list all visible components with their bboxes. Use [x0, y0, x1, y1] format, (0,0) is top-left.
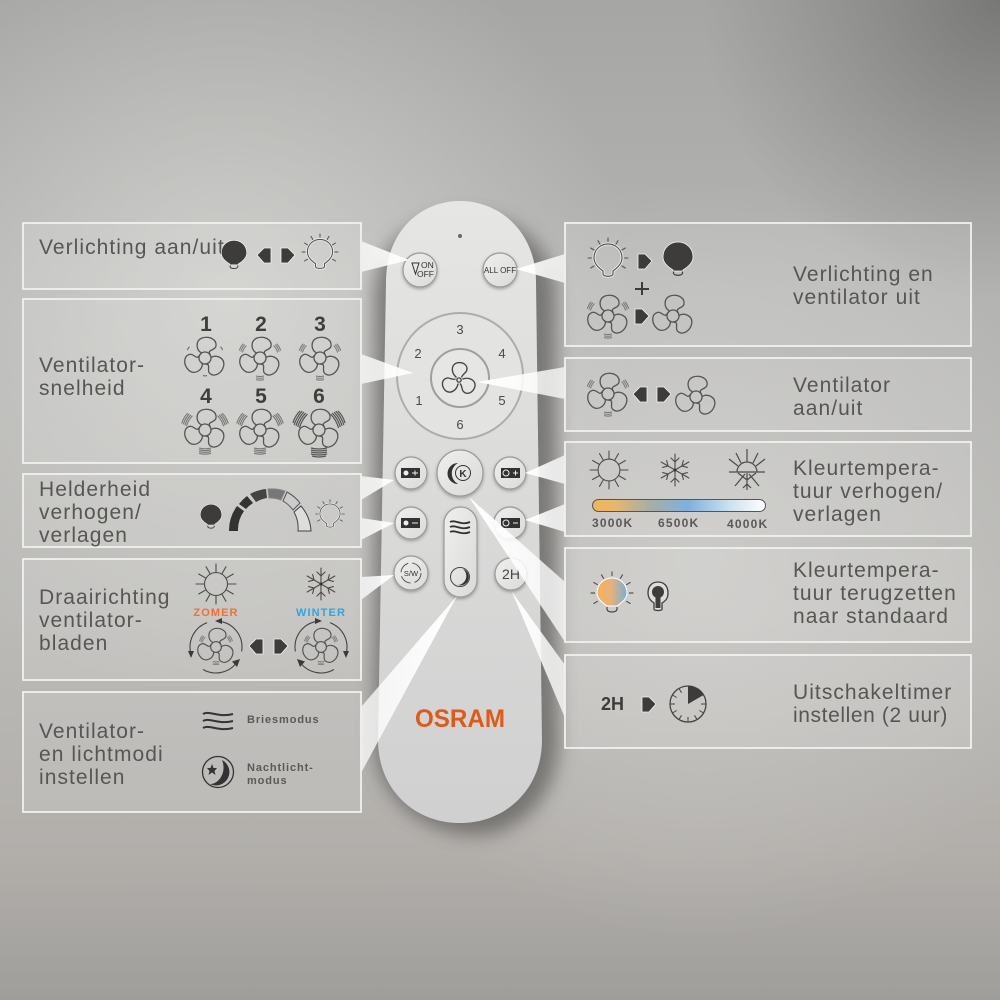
icon: dark bulb	[200, 504, 222, 528]
fan icons	[181, 337, 346, 457]
panel: timer	[565, 655, 971, 748]
scale labels: 4000K	[727, 517, 768, 531]
heading: tuur verhogen/	[793, 480, 943, 503]
speed ring: 2	[414, 346, 422, 361]
remote control body	[378, 201, 542, 823]
label: night light: modus	[247, 775, 288, 787]
button: rotation direction	[394, 556, 428, 590]
heading: ventilator uit	[793, 286, 921, 309]
panel: colour temperature	[565, 442, 971, 536]
heading: Verlichting aan/uit	[39, 236, 225, 259]
label: 2H: 2H	[601, 694, 624, 714]
panel: fan on/off	[565, 358, 971, 431]
icon: arrow	[638, 254, 652, 269]
icon: fan off	[650, 295, 695, 336]
panel: colour reset	[565, 548, 971, 642]
speed numbers: 4	[200, 385, 212, 408]
button: colour up	[494, 457, 526, 489]
plus	[635, 282, 649, 295]
icon: light bulb	[302, 234, 338, 268]
icon: arrow left	[257, 248, 271, 263]
label: summer: ZOMER	[193, 607, 239, 619]
heading: Ventilator-	[39, 354, 145, 377]
scale labels	[592, 516, 768, 531]
heading: instellen (2 uur)	[793, 704, 948, 727]
speed ring	[397, 313, 523, 439]
speed numbers: 5	[255, 385, 267, 408]
icon: fan running	[585, 373, 630, 416]
panel: light and fan off	[565, 223, 971, 346]
button: colour down	[494, 507, 526, 539]
button: brightness up	[395, 457, 427, 489]
heading: Ventilator-	[39, 720, 145, 743]
icon: colour bulb	[591, 572, 633, 612]
speed ring: 3	[456, 322, 464, 337]
heading: bladen	[39, 632, 108, 655]
heading: snelheid	[39, 377, 126, 400]
icon: fan running	[585, 295, 630, 338]
button: colour reset K	[437, 450, 483, 496]
icon: snowflake	[305, 568, 337, 600]
icon: light bulb	[588, 238, 628, 276]
speed numbers	[200, 313, 326, 408]
button: 2H	[495, 558, 527, 590]
icon: breeze	[203, 713, 233, 729]
icon: fan off	[673, 376, 718, 417]
button: on/off: ON	[421, 260, 434, 270]
label: breeze: Briesmodus	[247, 714, 320, 726]
speed ring: 4	[498, 346, 506, 361]
button: brightness down	[395, 507, 427, 539]
panel: modes	[23, 692, 361, 812]
fan summer	[188, 618, 242, 673]
panel: fan speed	[23, 299, 361, 463]
label: winter: WINTER	[296, 607, 346, 619]
button: all off	[483, 253, 517, 287]
heading: verlagen	[39, 524, 128, 547]
speed ring: 6	[456, 417, 464, 432]
heading: Helderheid	[39, 478, 151, 501]
remote shadow	[374, 215, 559, 835]
indicator led	[458, 234, 462, 238]
heading: verhogen/	[39, 501, 142, 524]
button: on/off	[403, 253, 437, 287]
brightness gauge	[229, 489, 311, 531]
logo: OSRAM	[415, 705, 505, 733]
arrows	[249, 639, 288, 654]
button: all off: ALL OFF	[484, 266, 516, 275]
icon: light bulb	[316, 500, 344, 527]
icon: key	[648, 582, 668, 610]
icon: half sun half snow	[729, 449, 765, 490]
icon: snowflake	[659, 454, 691, 486]
heading: aan/uit	[793, 397, 863, 420]
beams	[361, 241, 565, 773]
heading: Kleurtempera-	[793, 559, 940, 582]
pill button	[444, 507, 477, 597]
icon: clock	[670, 686, 706, 722]
icon: sun	[196, 564, 236, 604]
icon: arrow	[635, 309, 649, 324]
heading: naar standaard	[793, 605, 949, 628]
icon: dark bulb	[663, 242, 693, 275]
heading: Kleurtempera-	[793, 457, 940, 480]
heading: Draairichting	[39, 586, 171, 609]
panel: rotation direction	[23, 559, 361, 680]
heading: Ventilator	[793, 374, 891, 397]
button: colour reset K: K	[459, 469, 467, 480]
panel: lighting on/off	[23, 223, 361, 289]
button: 2H: 2H	[502, 566, 520, 582]
speed ring: 5	[498, 393, 506, 408]
heading: ventilator-	[39, 609, 143, 632]
label: night light: Nachtlicht-	[247, 762, 314, 774]
fan winter	[295, 618, 349, 673]
icon: night light	[202, 756, 234, 788]
scale labels: 6500K	[658, 516, 699, 530]
heading: Uitschakeltimer	[793, 681, 952, 704]
colour gradient bar	[592, 500, 766, 512]
heading: verlagen	[793, 503, 882, 526]
speed numbers: 6	[313, 385, 325, 408]
heading: Verlichting en	[793, 263, 934, 286]
icon: arrow	[642, 697, 656, 712]
icon: arrow right	[281, 248, 295, 263]
heading: en lichtmodi	[39, 743, 164, 766]
speed numbers: 1	[200, 313, 212, 336]
icon: sun	[590, 451, 628, 489]
arrows	[633, 387, 671, 402]
button: rotation direction: S/W	[404, 569, 419, 578]
icon: dark bulb	[221, 240, 247, 269]
speed numbers: 2	[255, 313, 267, 336]
heading: instellen	[39, 766, 126, 789]
heading: tuur terugzetten	[793, 582, 957, 605]
speed ring: 1	[415, 393, 423, 408]
scale labels: 3000K	[592, 516, 633, 530]
button: on/off: OFF	[417, 269, 434, 279]
panel: brightness	[23, 474, 361, 547]
speed numbers: 3	[314, 313, 326, 336]
